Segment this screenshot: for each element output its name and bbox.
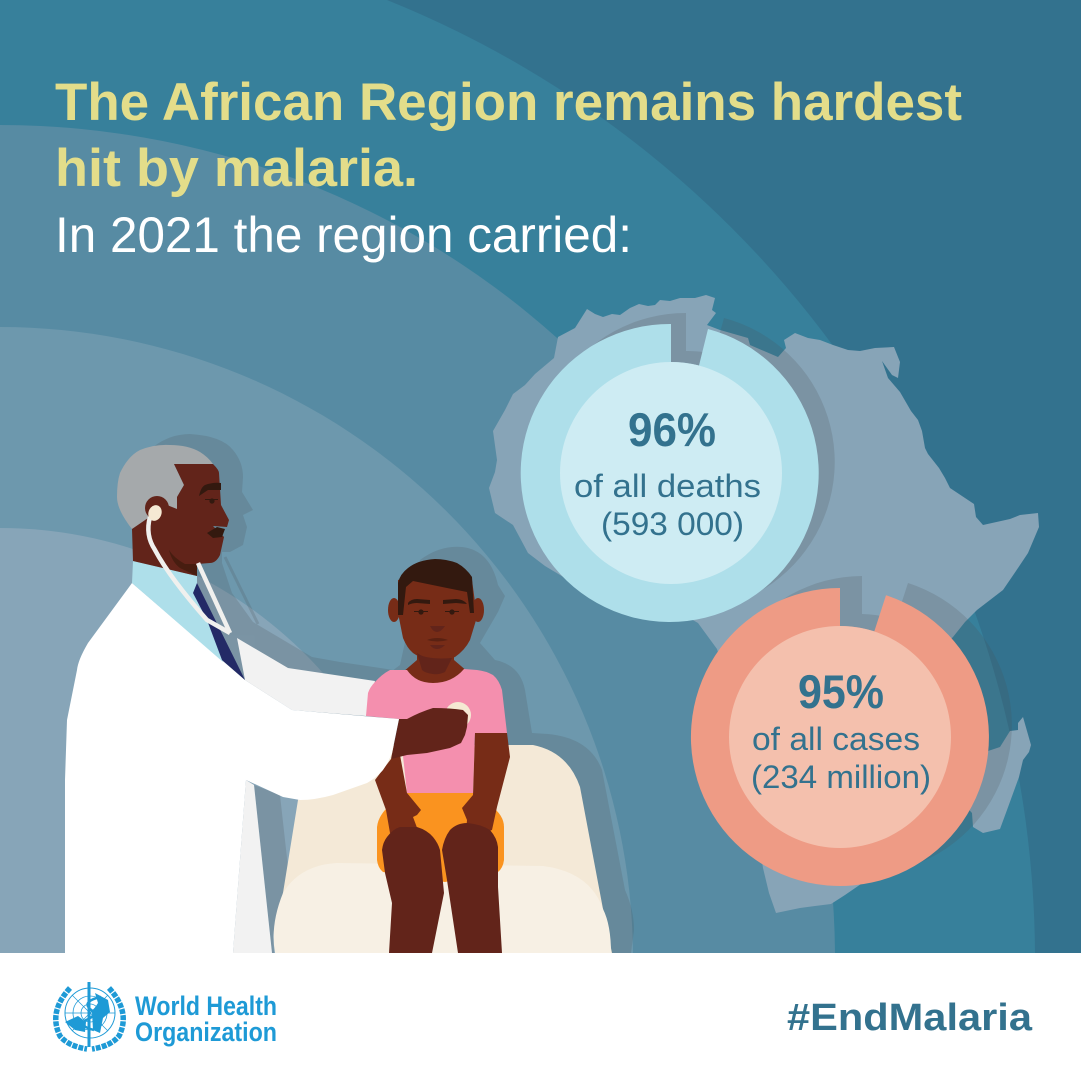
shorts — [377, 793, 504, 882]
head — [398, 565, 477, 660]
hand — [391, 708, 468, 759]
hair — [398, 559, 474, 615]
doctor coat — [65, 583, 246, 953]
face details — [408, 599, 467, 649]
eye — [205, 498, 218, 504]
shirt — [366, 669, 507, 793]
donut chart: 96% of all deaths: of all deaths — [574, 468, 761, 504]
hair — [117, 445, 213, 529]
jaw shade — [169, 550, 197, 576]
WHO emblem — [56, 982, 123, 1049]
neck shade — [417, 653, 452, 674]
doctor — [65, 445, 375, 953]
left ear — [388, 598, 400, 622]
WHO wordmark: Organization — [135, 1017, 277, 1047]
tie — [193, 583, 245, 680]
left leg — [382, 827, 444, 953]
collar — [132, 561, 223, 662]
donut shadow: deaths — [537, 313, 835, 611]
heading: The African Region remains hardest — [55, 73, 962, 132]
donut chart: 96% of all deaths: 96% — [628, 403, 716, 456]
earpiece — [146, 503, 164, 523]
coat inner strip — [233, 780, 272, 953]
child — [366, 559, 510, 953]
neck — [403, 645, 468, 690]
doctor sleeve and hand — [220, 680, 468, 800]
donut shadow: cases — [714, 576, 1012, 874]
couch — [274, 745, 612, 953]
figure shadows — [150, 434, 634, 953]
heading — [55, 73, 962, 198]
eyebrow — [199, 483, 221, 496]
sleeve — [220, 680, 399, 800]
right arm — [462, 733, 510, 835]
map: Africa — [489, 295, 1039, 913]
subheading: In 2021 the region carried: — [55, 207, 632, 263]
donut chart: 95% of all cases: (234 million) — [751, 759, 931, 795]
chest piece — [445, 702, 471, 728]
donut chart: 96% of all deaths: (593 000) — [601, 506, 744, 542]
donut chart: 96% of all deaths — [521, 324, 819, 622]
donut chart: 95% of all cases — [691, 588, 989, 886]
right ear — [472, 598, 484, 622]
footer band — [0, 953, 1081, 1081]
upper arm — [237, 638, 375, 716]
donut chart: 95% of all cases: 95% — [798, 665, 884, 718]
moustache — [207, 527, 225, 538]
WHO wordmark — [135, 991, 277, 1047]
stethoscope — [148, 517, 230, 633]
ear — [145, 496, 169, 520]
right leg — [442, 823, 502, 953]
hashtag: #EndMalaria — [787, 997, 1033, 1039]
heading: hit by malaria. — [55, 139, 418, 198]
left arm — [375, 755, 421, 840]
donut chart: 95% of all cases: of all cases — [752, 721, 920, 757]
face — [132, 464, 229, 576]
WHO wordmark: World Health — [135, 991, 277, 1021]
